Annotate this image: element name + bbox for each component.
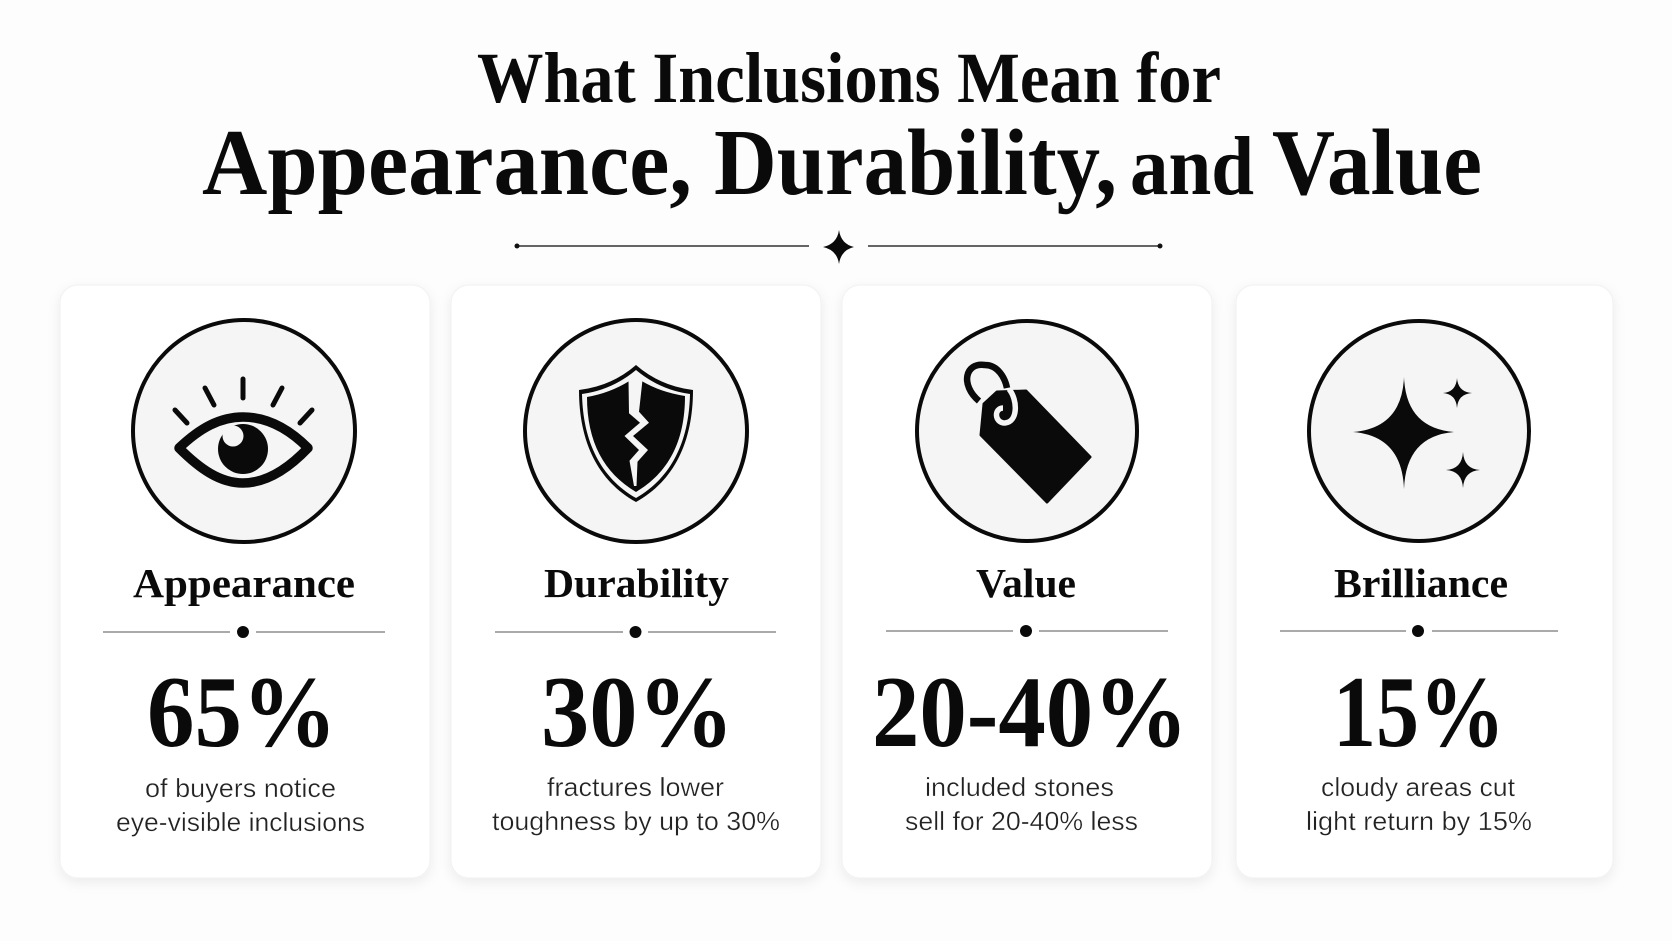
icon: cracked shield xyxy=(525,320,747,542)
stat: 30%: 30% xyxy=(541,656,734,769)
description: included stones xyxy=(925,772,1114,802)
heading: value: Value xyxy=(976,560,1076,606)
description: of buyers notice xyxy=(145,773,336,803)
description: toughness by up to 30% xyxy=(492,806,780,836)
panel: appearance xyxy=(60,285,430,878)
divider xyxy=(103,626,385,638)
icon: price tag xyxy=(917,321,1137,541)
description xyxy=(905,772,1138,836)
stat: 65%: 65% xyxy=(147,656,337,769)
heading: brilliance: Brilliance xyxy=(1334,560,1508,606)
description xyxy=(116,773,365,837)
description xyxy=(492,772,780,836)
title: and xyxy=(1130,120,1254,213)
title: What Inclusions Mean for xyxy=(477,38,1221,118)
panel: brilliance xyxy=(1236,285,1613,878)
title: Value xyxy=(1272,111,1482,215)
icon: eye xyxy=(133,320,355,542)
title divider with star xyxy=(514,230,1162,264)
description: sell for 20-40% less xyxy=(905,806,1138,836)
panel: value xyxy=(842,285,1212,878)
description: cloudy areas cut xyxy=(1321,772,1516,802)
stat: 15%: 15% xyxy=(1333,656,1505,769)
title xyxy=(202,38,1482,215)
stat: 20-40%: 20-40% xyxy=(872,656,1188,769)
description: eye-visible inclusions xyxy=(116,807,365,837)
description xyxy=(1306,772,1532,836)
title: Appearance, xyxy=(202,111,692,215)
title: Durability, xyxy=(714,111,1117,215)
panel: durability xyxy=(451,285,821,878)
divider xyxy=(495,626,776,638)
heading: appearance: Appearance xyxy=(133,560,355,606)
description: fractures lower xyxy=(547,772,724,802)
heading: durability: Durability xyxy=(544,560,729,606)
icon: sparkles xyxy=(1309,321,1529,541)
divider xyxy=(1280,625,1558,637)
description: light return by 15% xyxy=(1306,806,1532,836)
divider xyxy=(886,625,1168,637)
